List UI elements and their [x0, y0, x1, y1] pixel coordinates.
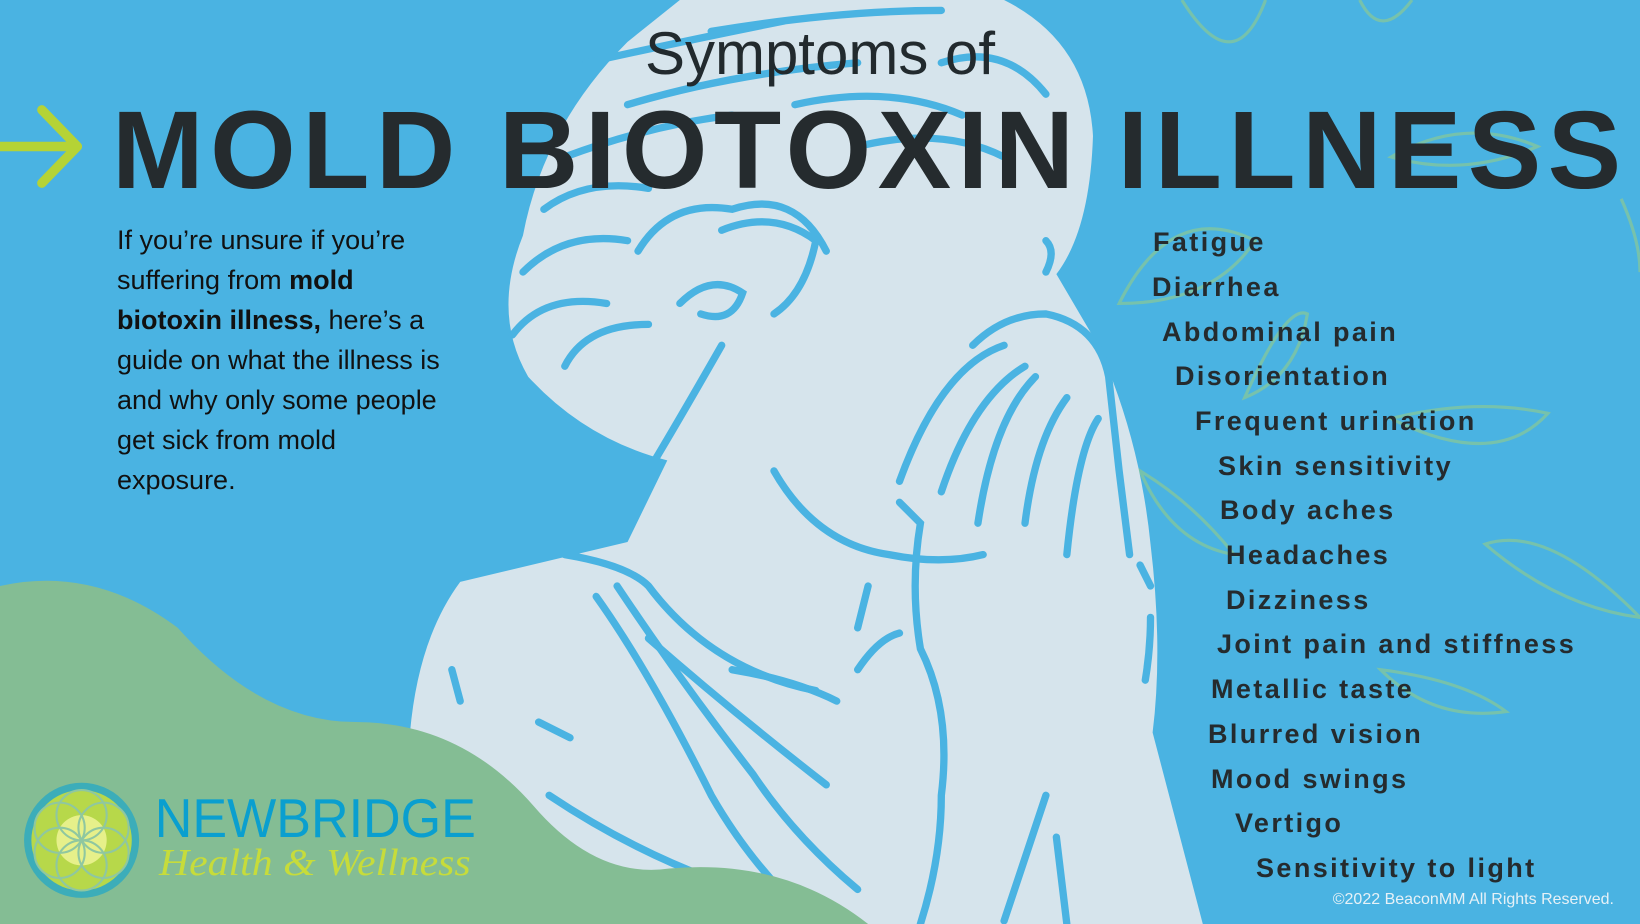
logo text: NEWBRIDGE	[155, 788, 476, 849]
symptom list: Metallic taste	[1211, 674, 1414, 704]
symptom list: Sensitivity to light	[1256, 853, 1537, 883]
symptom list: Skin sensitivity	[1218, 451, 1453, 481]
decorative leaves	[1119, 0, 1640, 713]
symptom list: Joint pain and stiffness	[1217, 629, 1576, 659]
symptom list: Blurred vision	[1208, 719, 1423, 749]
statue silhouette	[410, 0, 1203, 924]
symptom list: Vertigo	[1235, 808, 1343, 838]
icon: flower of life	[24, 783, 139, 898]
arrow	[0, 110, 77, 183]
symptom list: Frequent urination	[1195, 406, 1477, 436]
symptom list: Disorientation	[1175, 361, 1390, 391]
subtitle: Symptoms of	[645, 20, 995, 87]
green blob	[0, 581, 868, 924]
copyright: ©2022 BeaconMM All Rights Reserved.	[1333, 891, 1614, 908]
logo	[24, 783, 476, 898]
symptom list: Body aches	[1220, 495, 1396, 525]
logo: Health & Wellness	[158, 842, 471, 884]
symptom list: Headaches	[1226, 540, 1390, 570]
symptom list: Abdominal pain	[1162, 317, 1398, 347]
symptom list: Dizziness	[1226, 585, 1371, 615]
symptom list: Diarrhea	[1152, 272, 1281, 302]
intro text: If you’re unsure if you’re suffering from mold biotoxin illness, here’s a guide on what the illness is and why only some people get sick from mold exposure.	[117, 225, 440, 495]
symptom list: Mood swings	[1211, 764, 1408, 794]
title: MOLD BIOTOXIN ILLNESS	[112, 89, 1628, 212]
symptom list: Fatigue	[1153, 227, 1266, 257]
